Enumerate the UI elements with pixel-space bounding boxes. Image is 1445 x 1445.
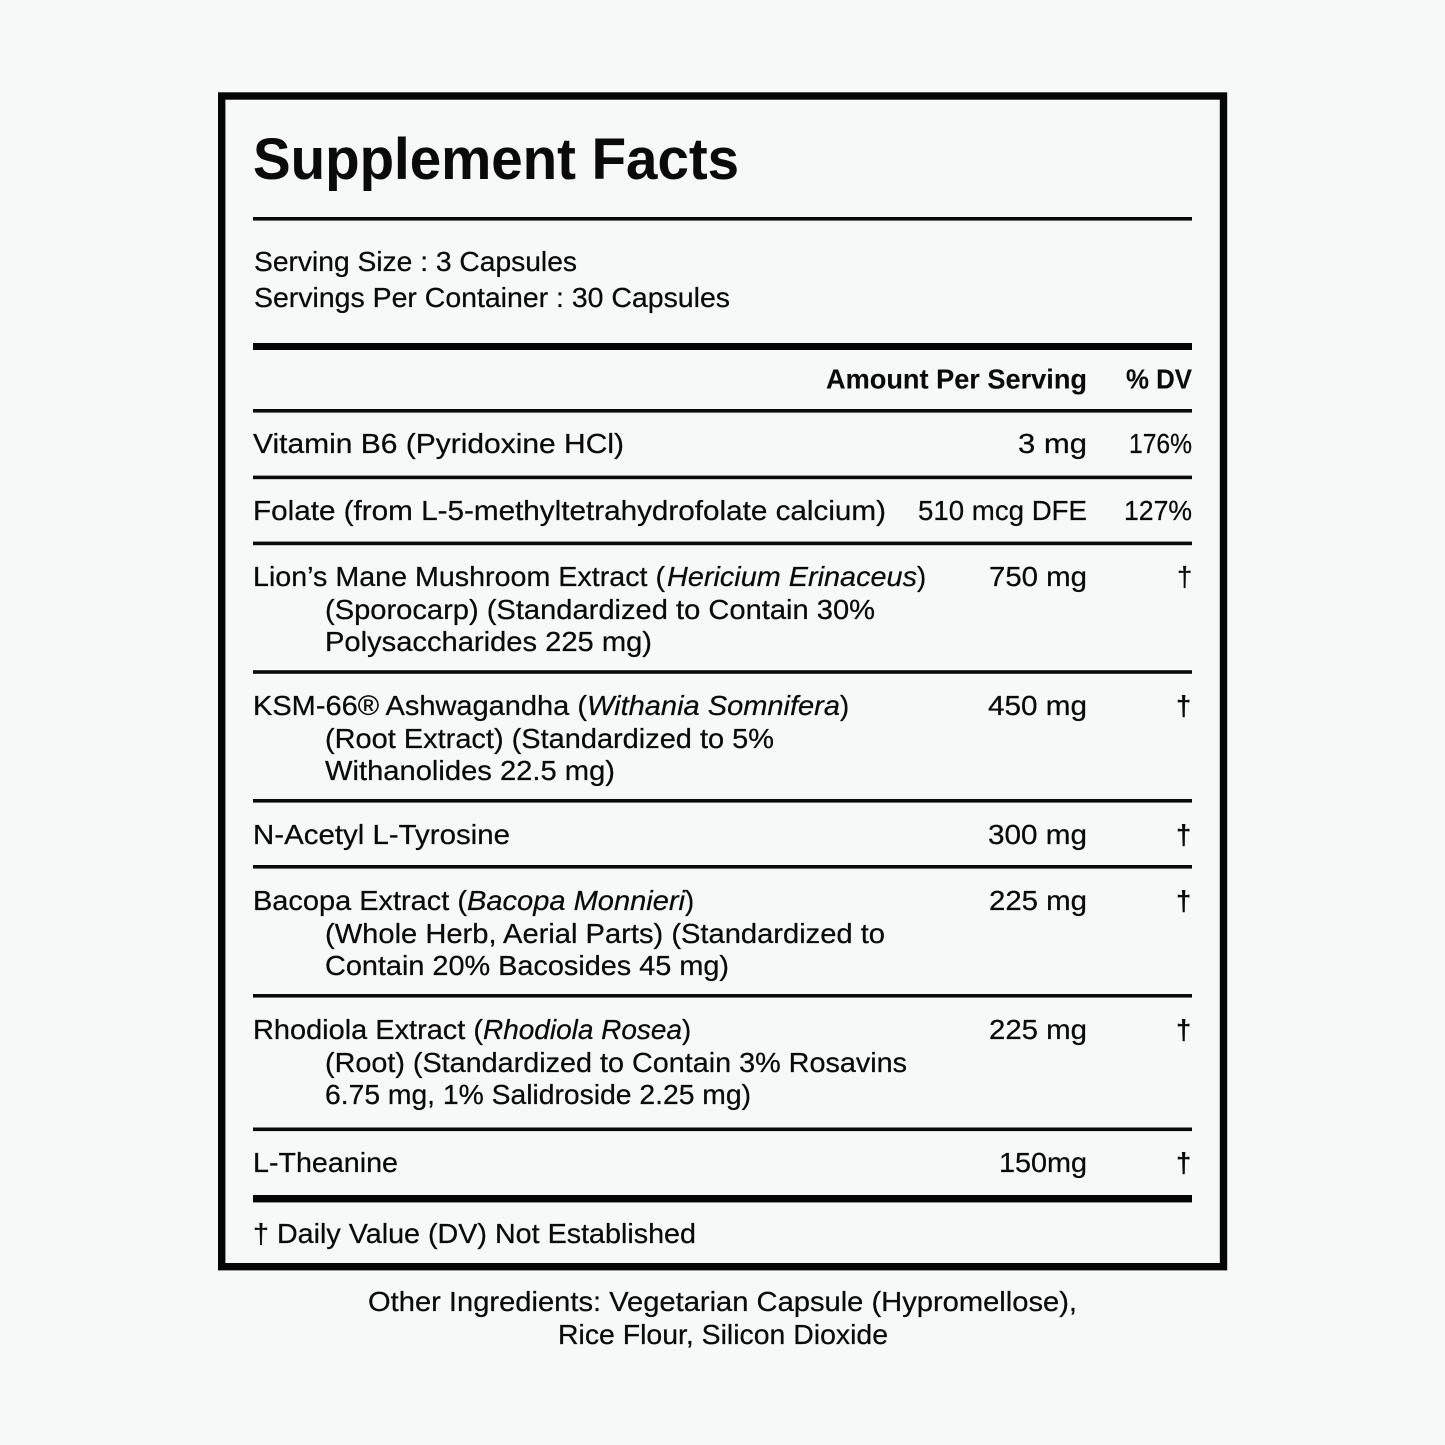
row: L-theanine: 150mg — [999, 1147, 1087, 1178]
row: KSM-66 ashwagandha — [253, 690, 1191, 786]
row: N-acetyl L-tyrosine: 300 mg — [988, 819, 1087, 850]
row: KSM-66 ashwagandha: Withanolides 22.5 mg) — [325, 755, 615, 786]
row: lion's mane: 750 mg — [989, 561, 1087, 592]
row: rhodiola: (Root) (Standardized to Contain 3% Rosavins — [325, 1047, 907, 1078]
row: vitamin B6: 176% — [1129, 428, 1192, 459]
table header: Amount Per Serving — [826, 364, 1087, 394]
row: KSM-66 ashwagandha: (Root Extract) (Standardized to 5% — [325, 723, 774, 754]
row: folate: Folate (from L-5-methyltetrahydrofolate calcium) — [253, 495, 886, 526]
row: folate — [253, 495, 1192, 526]
row: bacopa: Contain 20% Bacosides 45 mg) — [325, 950, 729, 981]
row: N-acetyl L-tyrosine: † — [1176, 819, 1191, 850]
row: lion's mane: Polysaccharides 225 mg) — [325, 626, 652, 657]
row: vitamin B6: Vitamin B6 (Pyridoxine HCl) — [253, 428, 624, 459]
row: bacopa: Bacopa Monnieri — [467, 885, 686, 916]
row: folate: 127% — [1124, 495, 1192, 526]
footnote: † Daily Value (DV) Not Established — [253, 1218, 696, 1249]
row: vitamin B6: 3 mg — [1018, 428, 1087, 459]
row: L-theanine: L-Theanine — [253, 1147, 398, 1178]
row: rhodiola: † — [1176, 1014, 1191, 1045]
row: rhodiola: Rhodiola Rosea — [483, 1014, 682, 1045]
row: rhodiola — [253, 1014, 1191, 1110]
other ingredients: Other Ingredients: Vegetarian Capsule (Hypromellose), — [368, 1286, 1077, 1317]
panel: supplement facts frame — [222, 96, 1223, 1267]
row: lion's mane: Lion’s Mane Mushroom Extract ( — [253, 561, 665, 592]
serving information: Servings Per Container : 30 Capsules — [254, 282, 730, 313]
row: KSM-66 ashwagandha: Withania Somnifera — [587, 690, 840, 721]
row: L-theanine — [253, 1147, 1191, 1178]
row: bacopa — [253, 885, 1191, 981]
row: KSM-66 ashwagandha: † — [1176, 690, 1191, 721]
title: Supplement Facts — [253, 127, 739, 192]
row: lion's mane: (Sporocarp) (Standardized to Contain 30% — [325, 594, 875, 625]
row: lion's mane: ) — [917, 561, 926, 592]
other ingredients: Rice Flour, Silicon Dioxide — [558, 1319, 888, 1350]
row: N-acetyl L-tyrosine: N-Acetyl L-Tyrosine — [253, 819, 510, 850]
row: bacopa: (Whole Herb, Aerial Parts) (Standardized to — [325, 918, 885, 949]
row: rhodiola: ) — [682, 1014, 691, 1045]
row: KSM-66 ashwagandha: KSM-66® Ashwagandha ( — [253, 690, 587, 721]
row: vitamin B6 — [253, 428, 1192, 459]
row: rhodiola: Rhodiola Extract ( — [253, 1014, 483, 1045]
row: bacopa: Bacopa Extract ( — [253, 885, 467, 916]
row: KSM-66 ashwagandha: 450 mg — [988, 690, 1087, 721]
row: bacopa: 225 mg — [989, 885, 1087, 916]
other ingredients — [368, 1286, 1077, 1350]
row: lion's mane: Hericium Erinaceus — [667, 561, 917, 592]
row: KSM-66 ashwagandha: ) — [840, 690, 849, 721]
row: bacopa: ) — [685, 885, 694, 916]
row: rhodiola: 6.75 mg, 1% Salidroside 2.25 mg) — [325, 1079, 751, 1110]
row: folate: 510 mcg DFE — [918, 495, 1087, 526]
row: lion's mane: † — [1177, 561, 1192, 592]
row: lion's mane — [253, 561, 1192, 657]
serving information: Serving Size : 3 Capsules — [254, 246, 577, 277]
row: L-theanine: † — [1176, 1147, 1191, 1178]
row: rhodiola: 225 mg — [989, 1014, 1087, 1045]
table header: % DV — [1126, 364, 1193, 394]
row: N-acetyl L-tyrosine — [253, 819, 1191, 850]
row: bacopa: † — [1176, 885, 1191, 916]
serving information — [254, 246, 730, 313]
